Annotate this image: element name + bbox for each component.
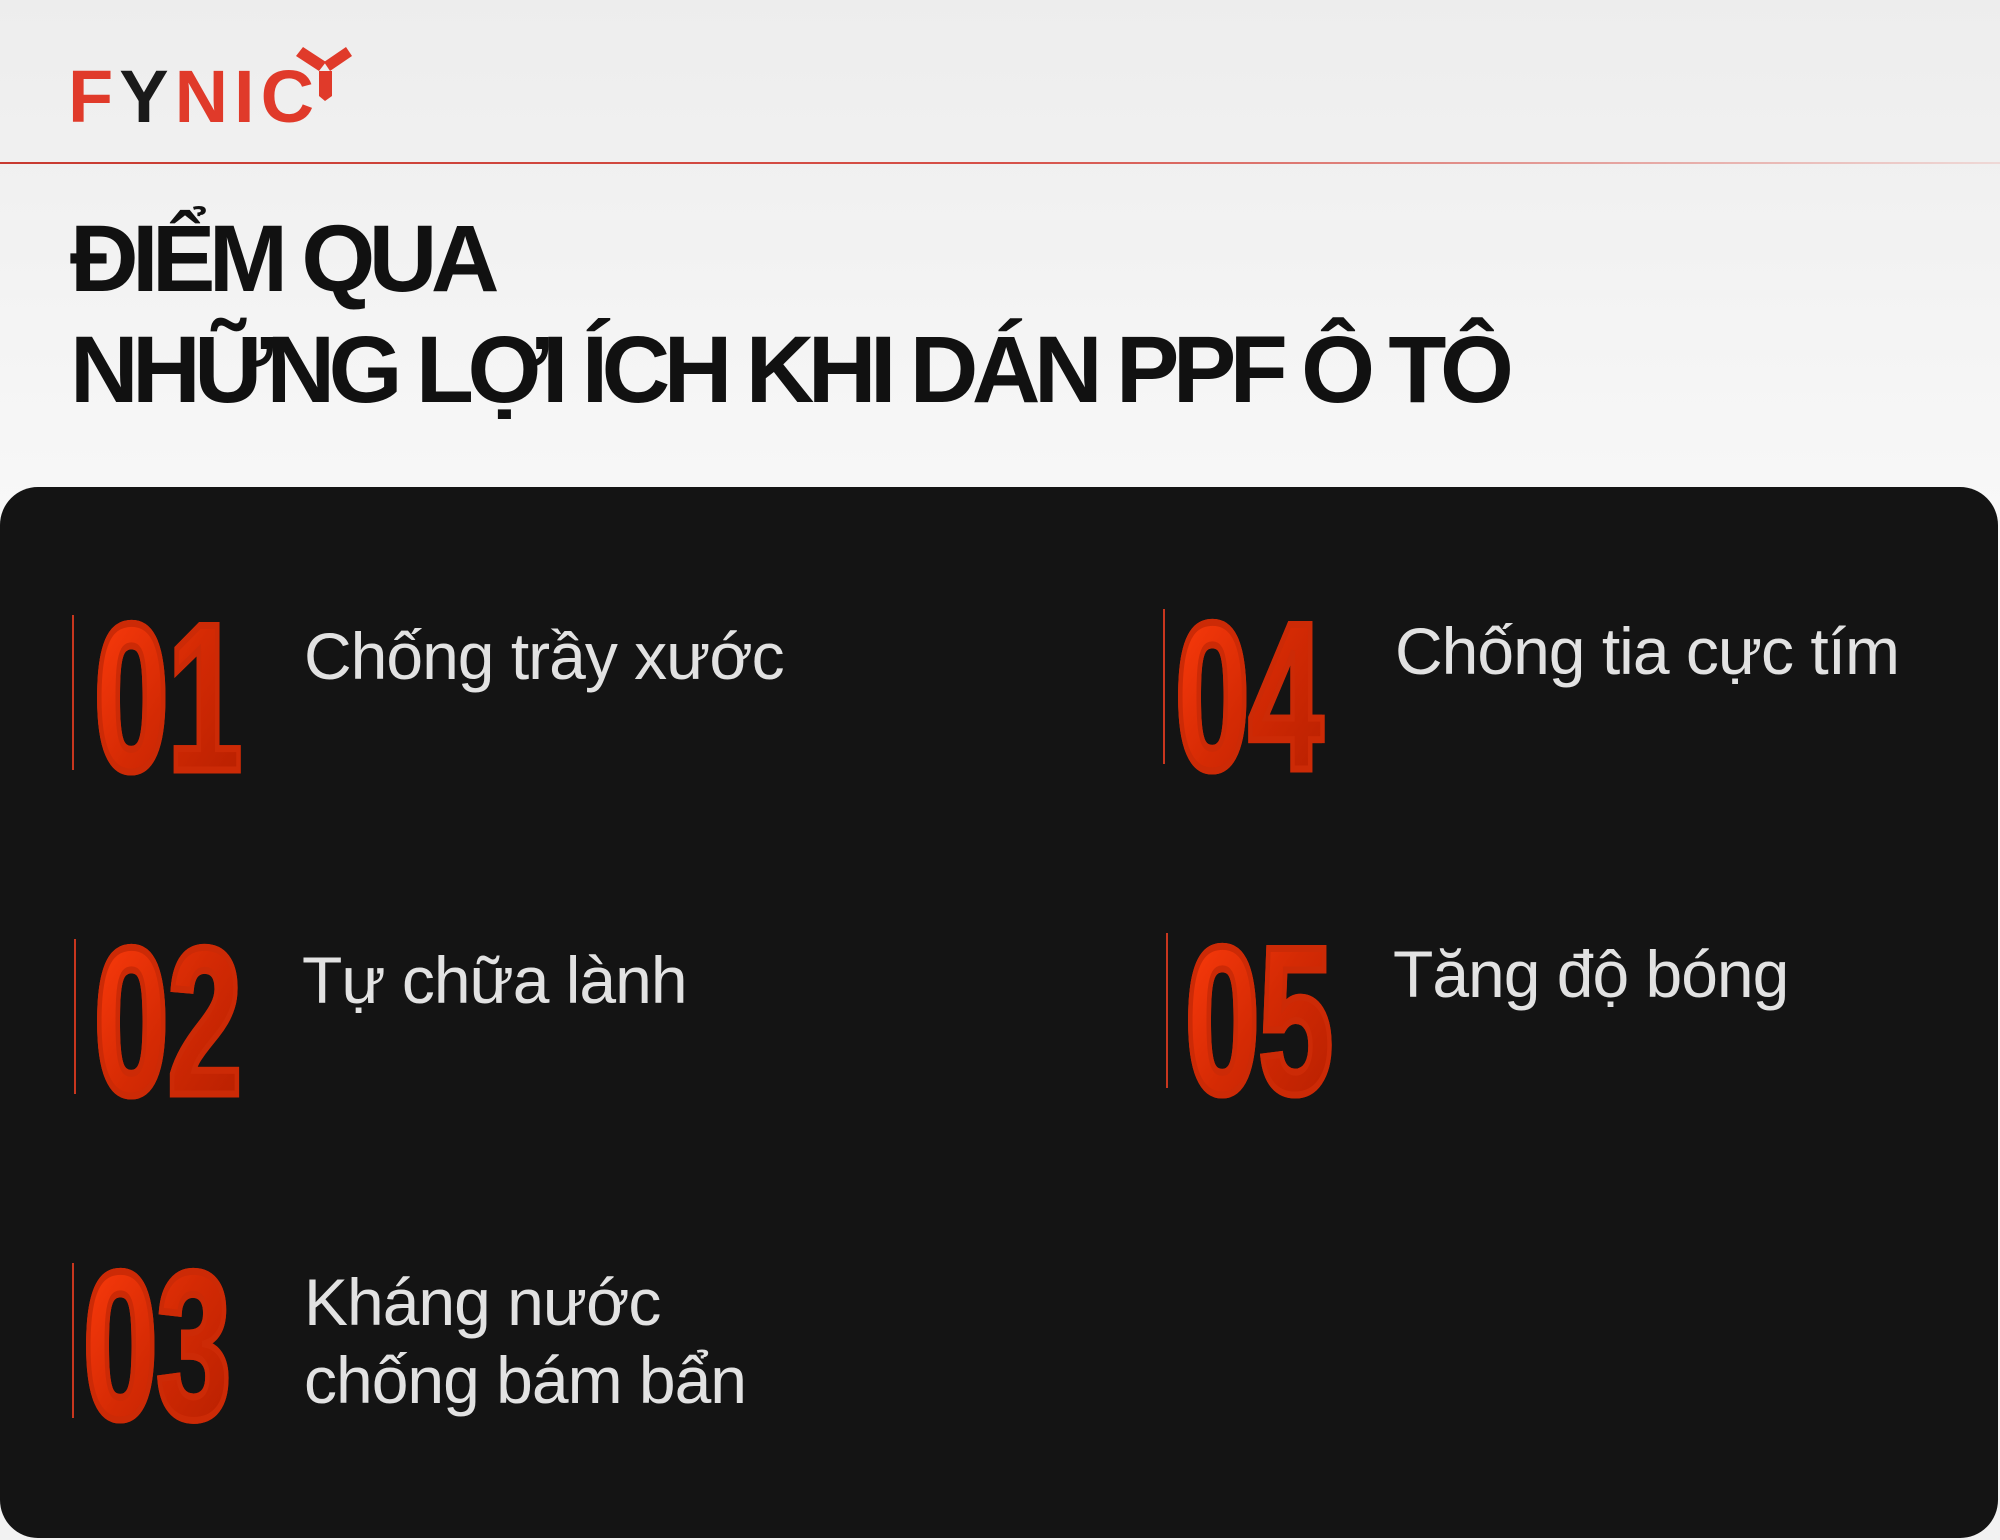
item 05: 05: [1185, 903, 1332, 1138]
item 05: Tăng độ bóng: [1393, 937, 1788, 1011]
title: [70, 206, 1510, 423]
item 04: [1163, 579, 1899, 814]
item 05: [1166, 903, 1788, 1138]
panel: benefits: [0, 487, 1998, 1538]
item 01: [72, 580, 784, 815]
item 01: Chống trầy xước: [304, 619, 784, 693]
icon: logo mark: [296, 47, 352, 101]
logo text: FYNIC: [68, 55, 320, 138]
logo: [68, 47, 352, 138]
item 03: 03: [83, 1228, 230, 1463]
item 04: Chống tia cực tím: [1395, 614, 1899, 688]
item 02: [74, 904, 687, 1139]
title: ĐIỂM QUA: [70, 206, 493, 312]
item 02: Tự chữa lành: [302, 943, 687, 1017]
item 03: chống bám bẩn: [304, 1343, 746, 1417]
item 02: 02: [94, 904, 241, 1139]
item 03: Kháng nước: [304, 1265, 660, 1339]
divider line: [0, 162, 2000, 164]
title: NHỮNG LỢI ÍCH KHI DÁN PPF Ô TÔ: [70, 317, 1507, 423]
item 01: 01: [94, 580, 241, 815]
item 04: 04: [1175, 579, 1322, 814]
item 03: [72, 1228, 746, 1463]
